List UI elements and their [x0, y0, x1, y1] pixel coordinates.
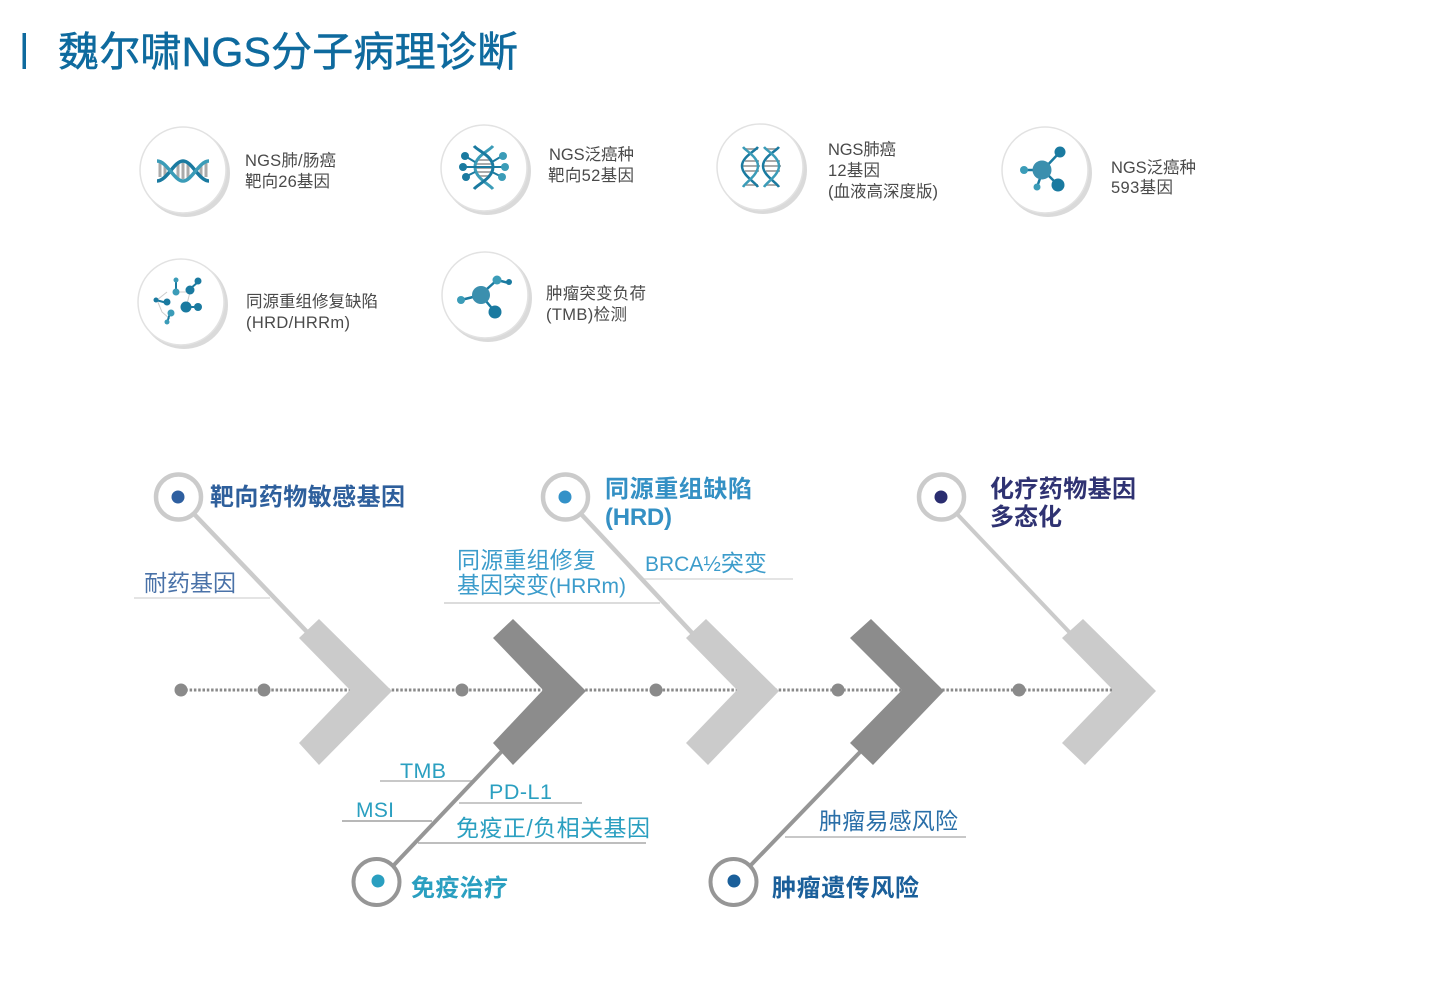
branch: hereditary risk — [710, 750, 966, 905]
label: BRCA: BRCA½突变 — [645, 550, 767, 576]
timeline dotted axis — [174, 684, 1115, 696]
text: NGS pan-cancer 52: NGS泛癌种 — [549, 145, 634, 164]
branch: chemo polymorphism — [919, 474, 1136, 635]
branch: immunotherapy: TMB — [400, 759, 446, 783]
branch: targeted drug sensitivity: 靶向药物敏感基因 — [210, 483, 405, 511]
text: TMB: (TMB)检测 — [546, 305, 627, 324]
panel: test items — [138, 124, 1196, 349]
branch: immunotherapy: 免疫治疗 — [411, 875, 508, 902]
branch: chemo polymorphism: 多态化 — [990, 504, 1062, 531]
text: NGS lung 12 genes: NGS肺癌 — [828, 140, 896, 159]
text: NGS pan-cancer 593: NGS泛癌种 — [1111, 158, 1196, 177]
text: NGS lung 12 genes: (血液高深度版) — [828, 182, 938, 201]
branch: hereditary risk: 肿瘤易感风险 — [819, 808, 958, 834]
branch: immunotherapy — [342, 750, 650, 905]
label: HRRm second line: 基因突变(HRRm) — [457, 572, 626, 598]
branch: HRD: 同源重组修复 — [457, 547, 596, 573]
text: HRD/HRRm: (HRD/HRRm) — [246, 314, 350, 332]
branch: chemo polymorphism: 化疗药物基因 — [990, 476, 1136, 503]
branch: targeted drug sensitivity: 耐药基因 — [144, 570, 236, 596]
branch: targeted drug sensitivity — [134, 474, 405, 635]
chart: fishbone timeline — [134, 474, 1156, 905]
branch: HRD — [444, 474, 793, 635]
text: TMB: 肿瘤突变负荷 — [546, 284, 646, 303]
icon: HRD molecules — [138, 259, 228, 349]
title: 魏尔啸NGS分子病理诊断 — [58, 29, 518, 75]
icon: TMB molecule — [442, 252, 532, 342]
branch: hereditary risk: 肿瘤遗传风险 — [772, 875, 919, 902]
branch: immunotherapy: PD-L1 — [489, 780, 552, 804]
icon: double DNA — [717, 124, 807, 214]
text: NGS lung and colorectal: 靶向26基因 — [245, 172, 330, 191]
branch: HRD: 同源重组缺陷 — [605, 476, 752, 503]
text: NGS lung 12 genes: 12基因 — [828, 161, 880, 180]
text: NGS pan-cancer 52: 靶向52基因 — [548, 166, 634, 185]
branch: immunotherapy: 免疫正/负相关基因 — [456, 815, 650, 841]
icon: molecule 593 — [1002, 127, 1092, 217]
chevrons — [299, 619, 1156, 765]
text: NGS lung and colorectal: NGS肺/肠癌 — [245, 151, 336, 170]
icon: DNA with nodes — [441, 125, 531, 215]
text: HRD/HRRm: 同源重组修复缺陷 — [246, 292, 378, 311]
branch: HRD: (HRD) — [605, 504, 672, 531]
text: NGS pan-cancer 593: 593基因 — [1111, 178, 1173, 197]
icon: DNA helix horizontal — [140, 127, 230, 217]
branch: immunotherapy: MSI — [356, 799, 394, 822]
